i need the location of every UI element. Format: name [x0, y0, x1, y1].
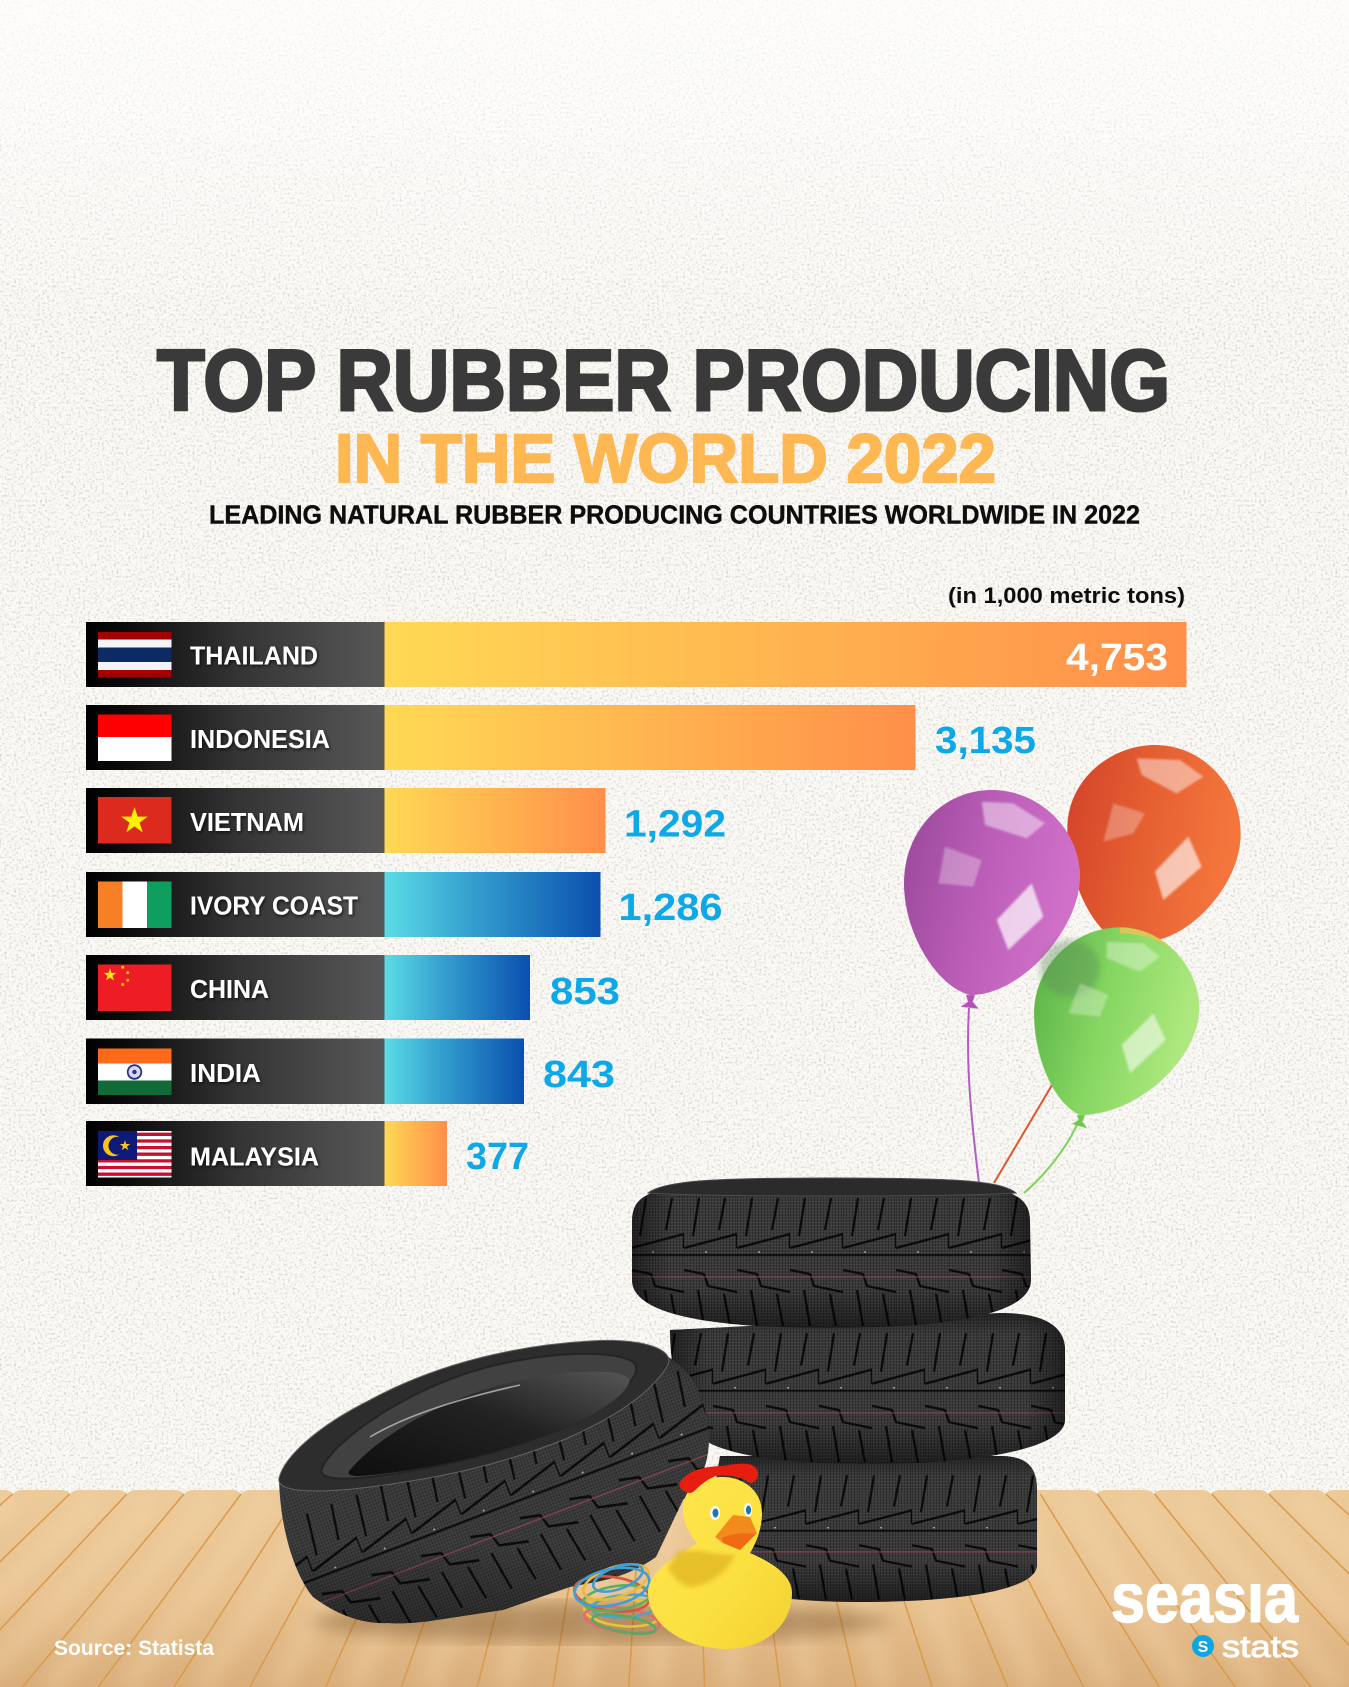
- balloon: purple: [904, 790, 1080, 1009]
- value: Malaysia: 377: [466, 1136, 529, 1178]
- row: Vietnam: [86, 788, 726, 853]
- row: Indonesia: [86, 705, 1036, 770]
- flag: India: [98, 1048, 172, 1095]
- flag: Malaysia: [98, 1131, 172, 1178]
- flag: Vietnam: [98, 797, 172, 844]
- source note: Source: Statista: [54, 1637, 214, 1660]
- value: India: 843: [543, 1054, 615, 1096]
- label: Indonesia: INDONESIA: [190, 726, 330, 754]
- logo icon: [1192, 1635, 1214, 1657]
- title line 2: IN THE WORLD 2022: [335, 420, 996, 497]
- flag: Indonesia: [98, 714, 172, 761]
- flag: China: [98, 964, 172, 1011]
- label: Thailand: THAILAND: [190, 642, 318, 670]
- tire: middle of stack: [670, 1313, 1065, 1464]
- value: Thailand: 4,753: [1066, 637, 1168, 679]
- unit note: (in 1,000 metric tons): [948, 583, 1185, 608]
- value: Ivory Coast: 1,286: [618, 887, 722, 929]
- logo wordmark: seasia: [1111, 1559, 1298, 1638]
- label: India: INDIA: [190, 1060, 261, 1088]
- logo: [1112, 1584, 1300, 1658]
- label: Ivory Coast: IVORY COAST: [190, 892, 358, 920]
- row: India: [86, 1038, 615, 1104]
- logo icon: S: [1198, 1639, 1209, 1656]
- label: Malaysia: MALAYSIA: [190, 1144, 319, 1172]
- tire: bottom of stack: [700, 1456, 1037, 1602]
- row: China: [86, 955, 620, 1020]
- value: Indonesia: 3,135: [935, 720, 1036, 762]
- flag: Thailand: [98, 632, 172, 678]
- balloon: green: [1034, 927, 1199, 1128]
- balloon strings: [968, 1008, 1077, 1193]
- balloons: [904, 745, 1241, 1128]
- label: Vietnam: VIETNAM: [190, 809, 304, 837]
- row: Thailand: [86, 622, 1186, 687]
- row: Malaysia: [86, 1121, 529, 1186]
- value: China: 853: [550, 971, 620, 1013]
- floor shadow: [310, 1602, 890, 1642]
- wooden floor: [0, 1490, 1349, 1687]
- tire: top of stack: [632, 1178, 1031, 1328]
- label: China: CHINA: [190, 976, 269, 1004]
- icon: rubber bands: [571, 1557, 661, 1637]
- title line 1: TOP RUBBER PRODUCING: [157, 333, 1170, 429]
- tire: leaning: [279, 1340, 709, 1623]
- balloon: orange: [1067, 745, 1241, 942]
- value: Vietnam: 1,292: [624, 804, 726, 846]
- flag: Ivory Coast: [98, 882, 172, 928]
- icon: rubber duck: [648, 1464, 792, 1649]
- logo sub-word: stats: [1222, 1629, 1299, 1664]
- subtitle: LEADING NATURAL RUBBER PRODUCING COUNTRIES WORLDWIDE IN 2022: [209, 502, 1140, 530]
- row: Ivory Coast: [86, 872, 722, 937]
- bar chart: [86, 622, 1186, 1186]
